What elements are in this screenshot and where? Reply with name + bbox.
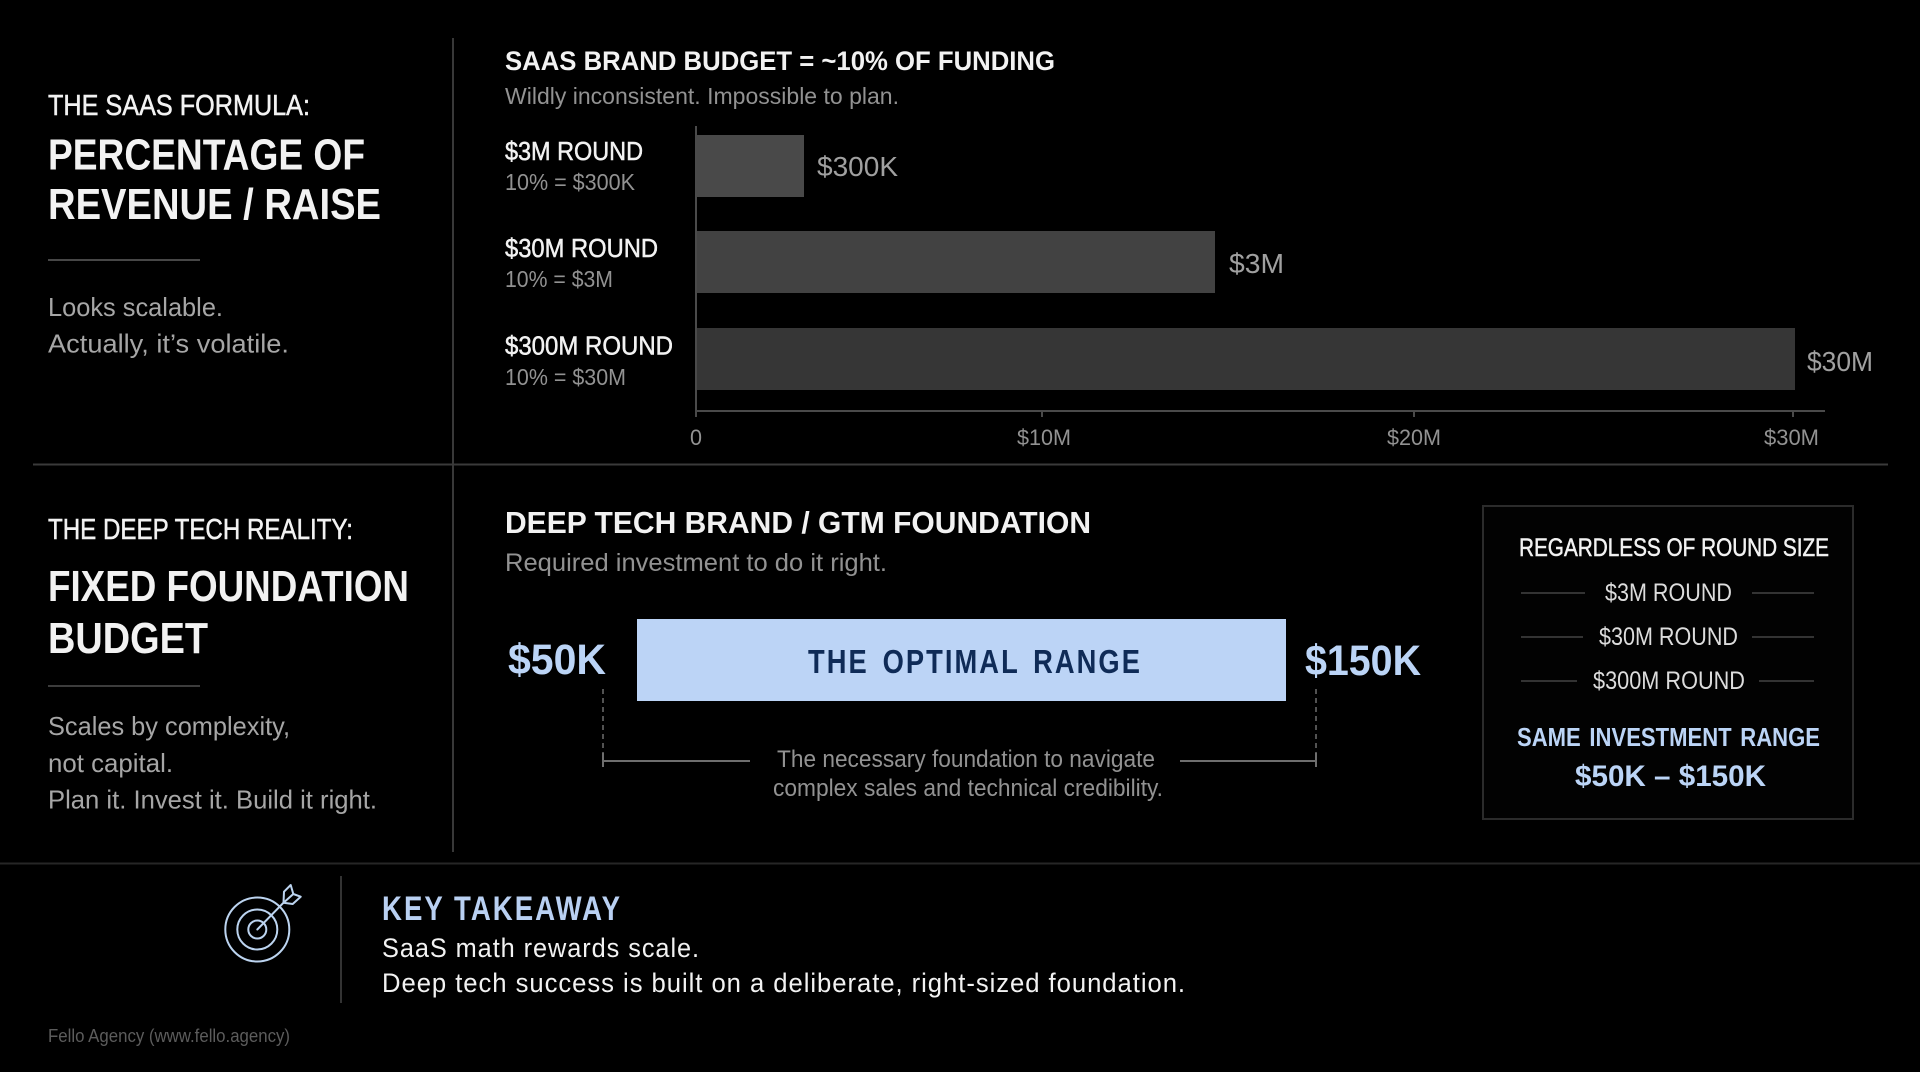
conclusion: same investment range [1517,722,1820,793]
row label: $3M round [505,136,643,195]
heading: fixed foundation budget: BUDGET [48,614,208,663]
axis labels: 0 [690,425,702,450]
heading: fixed foundation budget [48,562,409,663]
row label: $30M round: 10% = $3M [505,266,613,292]
range label: $50K: $50K [508,636,606,684]
list: round sizes [1521,579,1814,695]
bar chart [505,126,1873,450]
text block: scales by complexity: not capital. [48,748,173,778]
heading: percentage of revenue / raise [48,130,381,229]
heading: SaaS brand budget: SAAS BRAND BUDGET = ~10% OF FUNDING [505,46,1055,76]
bar: $3M round [696,135,804,197]
row label: $30M round [505,233,658,292]
text block: looks scalable: Looks scalable. [48,292,223,322]
panel heading: REGARDLESS OF ROUND SIZE [1519,534,1829,562]
value label: $30M: $30M [1807,346,1873,377]
icon: target with arrow [225,885,301,962]
value label: $3M: $3M [1229,248,1284,279]
axis labels: $30M [1764,425,1819,450]
text block: takeaway body [382,933,1186,998]
panel: deep tech reality [48,514,409,814]
heading: deep tech brand / GTM foundation: DEEP TECH BRAND / GTM FOUNDATION [505,505,1091,540]
text block: scales by complexity: Scales by complexity, [48,711,290,741]
subheading: required investment: Required investment to do it right. [505,549,887,577]
text block: scales by complexity: Plan it. Invest it. Build it right. [48,784,377,814]
range bar: the optimal range [637,619,1286,701]
heading: fixed foundation budget: FIXED FOUNDATION [48,562,409,611]
bracket: range annotation [603,689,1316,767]
row label: $300M round: 10% = $30M [505,364,626,390]
row label: $3M round: 10% = $300K [505,169,636,195]
chart axes [696,126,1825,417]
value label: $300K: $300K [817,151,898,182]
axis labels: $20M [1387,425,1441,450]
text block: takeaway body: Deep tech success is built on a deliberate, right-sized foundation. [382,968,1186,998]
subheading: wildly inconsistent: Wildly inconsistent. Impossible to plan. [505,83,899,109]
row label: $300M round: $300M ROUND [505,330,673,360]
text block: looks scalable [48,292,289,358]
panel: regardless of round size [1483,506,1853,819]
list: round sizes: $300M ROUND [1593,667,1745,695]
subheading: the SaaS formula: THE SAAS FORMULA: [48,90,310,122]
text block: takeaway body: SaaS math rewards scale. [382,933,700,963]
panel: deep tech foundation range [505,505,1421,802]
caption: necessary foundation: complex sales and technical credibility. [773,775,1163,802]
text block: looks scalable: Actually, it’s volatile. [48,328,289,358]
row label: $30M round: $30M ROUND [505,233,658,263]
text block: scales by complexity [48,711,377,814]
range label: $150K: $150K [1305,637,1421,685]
caption: necessary foundation: The necessary foundation to navigate [777,746,1155,773]
conclusion: same investment range: $50K – $150K [1575,760,1766,793]
footer credit: Fello Agency (www.fello.agency) [48,1026,290,1046]
heading: percentage of revenue / raise: PERCENTAGE OF [48,130,365,180]
panel: SaaS formula [48,90,381,358]
heading: percentage of revenue / raise: REVENUE / RAISE [48,180,381,229]
list: round sizes: $30M ROUND [1599,623,1738,651]
bar: $300M round [696,328,1795,390]
list: round sizes: $3M ROUND [1605,579,1732,607]
row label: $3M round: $3M ROUND [505,136,643,166]
subheading: the deep tech reality: THE DEEP TECH REALITY: [48,514,353,546]
conclusion: same investment range: SAME INVESTMENT RANGE [1517,722,1820,752]
heading: key takeaway: KEY TAKEAWAY [382,890,622,928]
axis labels: $10M [1017,425,1071,450]
panel: SaaS bar chart section [505,46,1873,450]
axis labels [690,425,1819,450]
bar: $30M round [696,231,1215,293]
caption: necessary foundation [773,746,1163,802]
range bar: the optimal range: THE OPTIMAL RANGE [808,643,1142,680]
row label: $300M round [505,330,673,390]
panel: key takeaway [225,876,1186,1003]
